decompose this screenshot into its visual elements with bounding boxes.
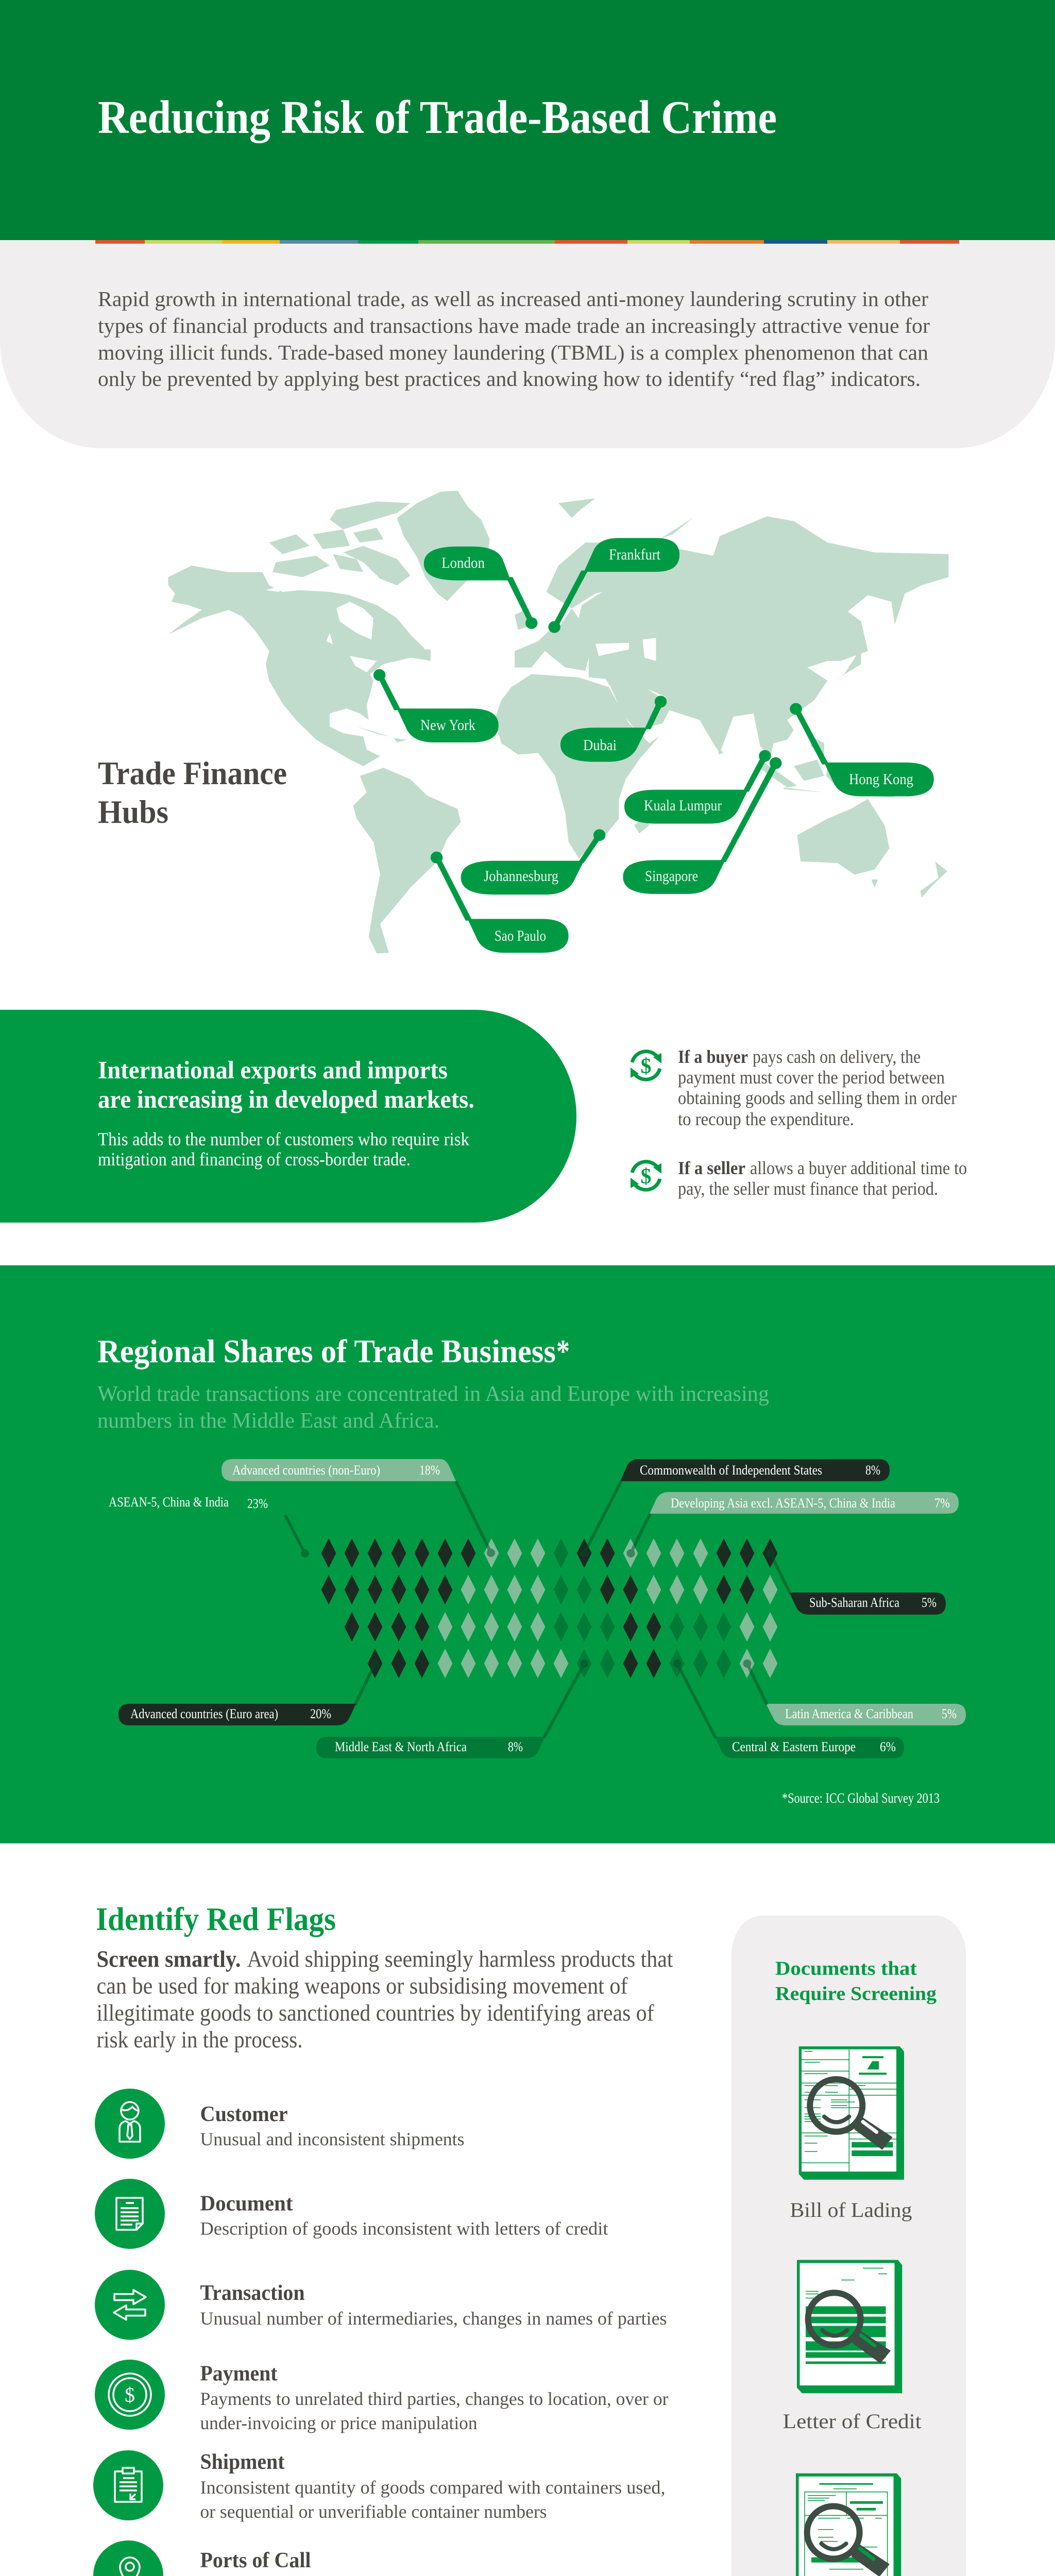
item: shipment: Shipment bbox=[200, 2450, 285, 2474]
callout: London bbox=[424, 547, 537, 629]
text: if a buyer: obtaining goods and selling them in order bbox=[678, 1088, 957, 1108]
callout: Johannesburg bbox=[461, 829, 605, 894]
item: ports of call: Ports of Call bbox=[200, 2549, 311, 2572]
callout: Singapore bbox=[623, 757, 782, 894]
world map bbox=[168, 490, 948, 954]
heading bbox=[98, 1056, 474, 1113]
label: advanced countries euro area: Advanced countries (Euro area) bbox=[130, 1706, 278, 1721]
icon: payment coin bbox=[95, 2360, 165, 2430]
item: customer: Unusual and inconsistent shipments bbox=[200, 2129, 465, 2149]
heading: * bbox=[556, 1333, 570, 1369]
text: if a buyer: If a buyer bbox=[678, 1046, 748, 1067]
text: if a seller: If a seller bbox=[678, 1158, 745, 1178]
callout: Sao Paulo: Sao Paulo bbox=[495, 927, 546, 944]
intro text: moving illicit funds. Trade-based money laundering (TBML) is a complex phenomenon that can bbox=[98, 341, 928, 364]
label: advanced countries non-euro: Advanced countries (non-Euro) bbox=[232, 1463, 380, 1478]
title: Reducing Risk of Trade-Based Crime bbox=[98, 91, 777, 143]
intro text bbox=[98, 287, 930, 391]
subheading: numbers in the Middle East and Africa. bbox=[97, 1409, 439, 1433]
panel heading bbox=[775, 1958, 937, 2005]
callout: Hong Kong: Hong Kong bbox=[849, 771, 913, 788]
text block: screen smartly: illegitimate goods to sanctioned countries by identifying areas of bbox=[97, 1999, 654, 2026]
label: middle east and north africa: 8% bbox=[508, 1739, 523, 1754]
callout: Dubai: Dubai bbox=[583, 737, 617, 754]
text block: screen smartly: Screen smartly. bbox=[97, 1945, 241, 1972]
heading: identify red flags: Identify Red Flags bbox=[96, 1901, 336, 1937]
panel: intro background bbox=[0, 240, 1055, 448]
label: latin america and caribbean: 5% bbox=[942, 1706, 957, 1721]
label: developing Asia: Developing Asia excl. ASEAN-5, China & India bbox=[671, 1496, 895, 1511]
icon: transaction arrows bbox=[95, 2270, 165, 2340]
label: ASEAN-5, China and India bbox=[109, 1495, 309, 1557]
label: advanced countries non-euro bbox=[222, 1459, 495, 1557]
callout: Kuala Lumpur: Kuala Lumpur bbox=[644, 797, 722, 814]
item: shipment: or sequential or unverifiable container numbers bbox=[200, 2501, 547, 2522]
label: middle east and north africa bbox=[316, 1659, 588, 1758]
label: advanced countries non-euro: 18% bbox=[419, 1463, 440, 1478]
label: commonwealth of independent states: Commonwealth of Independent States bbox=[640, 1463, 822, 1478]
heading: Regional Shares of Trade Business bbox=[97, 1333, 556, 1369]
intro text: Rapid growth in international trade, as well as increased anti-money laundering scrutiny in other bbox=[98, 287, 928, 311]
label: letter of credit: Letter of Credit bbox=[783, 2410, 922, 2433]
item: document: Description of goods inconsistent with letters of credit bbox=[200, 2218, 608, 2239]
text: if a seller bbox=[678, 1158, 967, 1199]
heading: are increasing in developed markets. bbox=[98, 1085, 474, 1113]
item: ports of call bbox=[93, 2540, 636, 2576]
label: advanced countries euro area bbox=[118, 1659, 379, 1725]
label: bill of lading: Bill of Lading bbox=[790, 2198, 912, 2222]
text: if a seller: pay, the seller must finance that period. bbox=[678, 1178, 938, 1199]
text: if a seller: allows a buyer additional time to bbox=[750, 1158, 967, 1178]
icon: document bbox=[95, 2179, 165, 2249]
intro text: only be prevented by applying best practices and knowing how to identify “red flag” indicators. bbox=[98, 367, 921, 391]
text block: mitigation and financing of cross-border trade. bbox=[98, 1149, 411, 1170]
callout: Dubai bbox=[560, 696, 667, 762]
label: developing Asia bbox=[626, 1492, 959, 1557]
text block: screen smartly: risk early in the process. bbox=[97, 2026, 303, 2053]
label: developing Asia: 7% bbox=[934, 1496, 950, 1511]
heading: trade finance hubs: Hubs bbox=[98, 794, 168, 830]
heading: trade finance hubs bbox=[98, 755, 287, 830]
callout: Frankfurt: Frankfurt bbox=[609, 546, 661, 563]
item: payment: Payment bbox=[200, 2362, 278, 2385]
panel: documents that require screening bbox=[731, 1916, 966, 2576]
label: advanced countries euro area: 20% bbox=[310, 1706, 331, 1721]
label: central and eastern europe: 6% bbox=[880, 1739, 896, 1754]
callout: Johannesburg: Johannesburg bbox=[484, 868, 558, 885]
item: document: Document bbox=[200, 2192, 293, 2215]
label: sub-saharan africa: Sub-Saharan Africa bbox=[809, 1595, 899, 1610]
item: transaction bbox=[95, 2270, 667, 2340]
text: if a buyer: pays cash on delivery, the bbox=[753, 1046, 921, 1067]
subheading: World trade transactions are concentrated in Asia and Europe with increasing bbox=[97, 1382, 769, 1406]
text block bbox=[98, 1129, 469, 1170]
label: central and eastern europe bbox=[673, 1659, 904, 1758]
label: commonwealth of independent states: 8% bbox=[865, 1463, 880, 1478]
item: payment: under-invoicing or price manipulation bbox=[200, 2413, 477, 2433]
item: shipment bbox=[93, 2450, 666, 2522]
label: middle east and north africa: Middle East & North Africa bbox=[335, 1739, 467, 1754]
item: transaction: Unusual number of intermediaries, changes in names of parties bbox=[200, 2308, 667, 2329]
callout: New York bbox=[373, 669, 499, 742]
icon: shipment clipboard bbox=[93, 2450, 163, 2520]
label: ASEAN-5, China and India: 23% bbox=[247, 1496, 268, 1511]
item: payment bbox=[95, 2360, 669, 2433]
icon: letter of credit bbox=[797, 2260, 902, 2393]
item: payment: Payments to unrelated third parties, changes to location, over or bbox=[200, 2388, 669, 2409]
label: commonwealth of independent states bbox=[580, 1459, 890, 1557]
panel heading: Require Screening bbox=[775, 1983, 937, 2005]
callout: Sao Paulo bbox=[431, 852, 569, 953]
panel heading: Documents that bbox=[775, 1958, 917, 1979]
icon: customer bbox=[95, 2089, 165, 2159]
panel: international exports bbox=[0, 1010, 576, 1223]
source note: *Source: ICC Global Survey 2013 bbox=[782, 1790, 940, 1806]
label: sub-saharan africa bbox=[767, 1549, 946, 1615]
text: if a buyer bbox=[678, 1046, 957, 1129]
subheading bbox=[97, 1382, 769, 1433]
text block: screen smartly: can be used for making weapons or subsidising movement of bbox=[97, 1972, 628, 1999]
item: transaction: Transaction bbox=[200, 2281, 305, 2305]
icon: dollar cycle seller bbox=[631, 1162, 661, 1190]
heading: International exports and imports bbox=[98, 1056, 448, 1084]
panel: header banner bbox=[0, 0, 1055, 240]
callout: Kuala Lumpur bbox=[624, 750, 771, 824]
icon: commercial invoice bbox=[796, 2473, 901, 2576]
icon: map pin bbox=[93, 2540, 163, 2576]
icon: dollar cycle buyer bbox=[631, 1052, 661, 1079]
label: ASEAN-5, China and India: ASEAN-5, China & India bbox=[109, 1495, 229, 1510]
panel: regional shares bbox=[0, 1265, 1055, 1843]
text: if a buyer: payment must cover the period between bbox=[678, 1067, 945, 1088]
label: sub-saharan africa: 5% bbox=[922, 1595, 937, 1610]
item: document bbox=[95, 2179, 608, 2249]
icon: payment coin: $ bbox=[125, 2383, 135, 2406]
label: latin america and caribbean: Latin America & Caribbean bbox=[785, 1706, 913, 1721]
icon: dollar cycle buyer: $ bbox=[641, 1055, 651, 1078]
diamond chart bbox=[321, 1538, 777, 1678]
icon: bill of lading bbox=[799, 2046, 904, 2180]
text: if a buyer: to recoup the expenditure. bbox=[678, 1109, 854, 1129]
text block: This adds to the number of customers who require risk bbox=[98, 1129, 469, 1149]
icon: dollar cycle seller: $ bbox=[641, 1165, 651, 1189]
callout: New York: New York bbox=[420, 717, 475, 734]
text block: screen smartly bbox=[97, 1945, 673, 2053]
item: customer bbox=[95, 2089, 465, 2159]
intro text: types of financial products and transactions have made trade an increasingly attractive venue for bbox=[98, 314, 930, 337]
callout: London: London bbox=[441, 554, 485, 571]
text block: screen smartly: Avoid shipping seemingly harmless products that bbox=[247, 1945, 673, 1972]
item: shipment: Inconsistent quantity of goods compared with containers used, bbox=[200, 2477, 666, 2498]
callout: Singapore: Singapore bbox=[645, 868, 698, 885]
label: latin america and caribbean bbox=[743, 1659, 966, 1725]
label: central and eastern europe: Central & Eastern Europe bbox=[732, 1739, 856, 1754]
callout: Hong Kong bbox=[790, 703, 934, 796]
heading: trade finance hubs: Trade Finance bbox=[98, 755, 287, 791]
colour strip: header bbox=[95, 240, 959, 244]
callout: Frankfurt bbox=[548, 538, 679, 633]
item: customer: Customer bbox=[200, 2103, 287, 2126]
